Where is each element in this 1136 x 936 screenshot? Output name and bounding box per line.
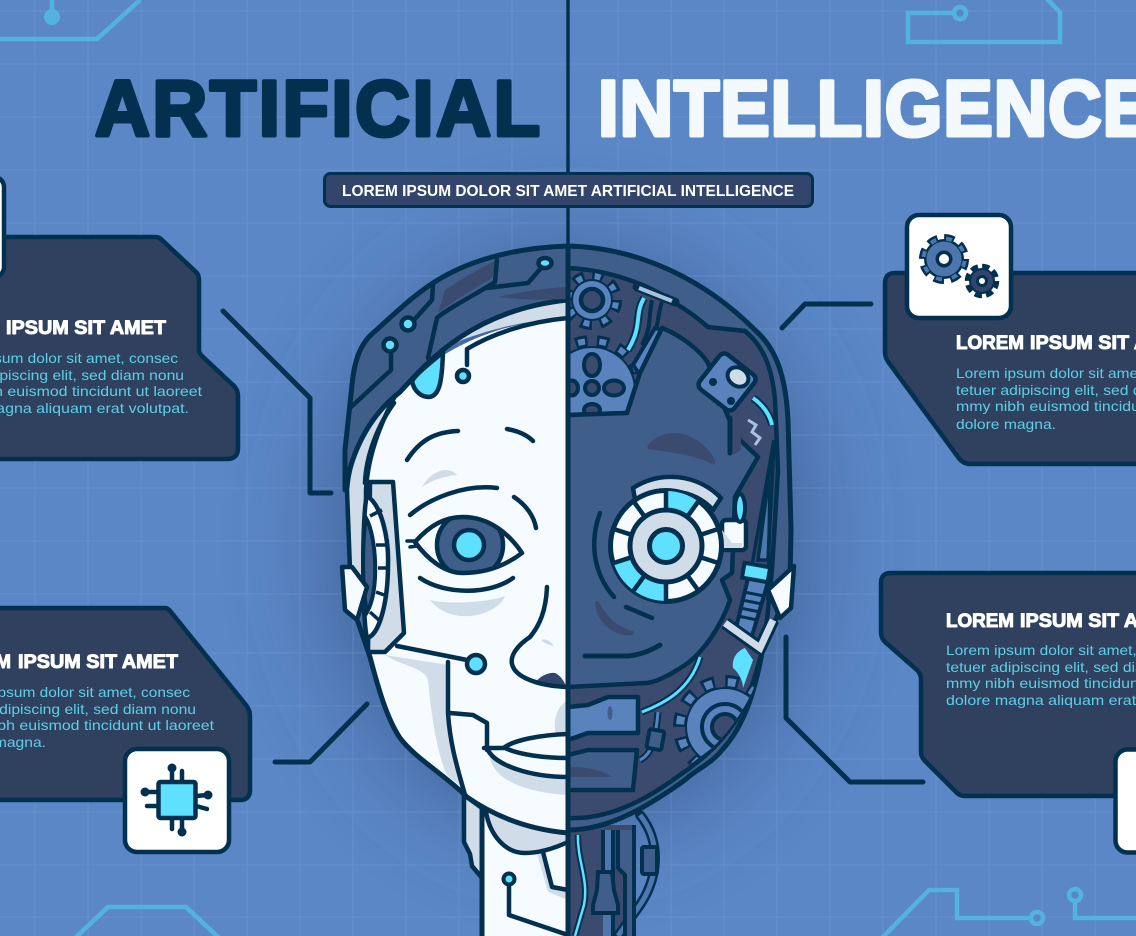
panel text: left bottom: [0, 684, 214, 750]
side strip: [347, 392, 397, 595]
ear panel: [363, 482, 404, 652]
gear: bottom right: [680, 682, 770, 772]
ear spike: right: [768, 566, 794, 618]
brows and wrinkles: [407, 429, 536, 616]
connector: left top: [223, 311, 331, 493]
panel heading: left bottom: IPSUM SIT AMET: [18, 652, 178, 673]
outer shell: [568, 246, 791, 830]
title word: artificial: ARTIFICIAL: [95, 65, 540, 153]
block connector: [696, 351, 758, 413]
brow shadow: [650, 435, 713, 462]
jaw shading: [385, 655, 465, 790]
head centre seam: [566, 244, 570, 936]
panel: right top: [885, 215, 1136, 464]
panel heading: left top: IPSUM SIT AMET: [6, 318, 166, 339]
circuit: bottom right: [882, 889, 1136, 936]
panel text: right bottom: [946, 642, 1136, 708]
nose: [512, 587, 568, 687]
icon: microchip: [125, 749, 229, 852]
cyan wire: right: [753, 398, 772, 425]
gear: top: [568, 276, 616, 324]
forehead circuit: [457, 318, 568, 382]
subtitle pill: [324, 174, 812, 206]
icon: gears: [907, 215, 1011, 318]
face outline top: [365, 403, 394, 483]
gear plate: [570, 335, 637, 413]
head: right mechanical half: [543, 246, 794, 830]
connector: right top: [782, 304, 871, 328]
title: [95, 65, 1136, 153]
human eye: [407, 512, 522, 578]
face base: [365, 318, 568, 833]
panel heading: right bottom: [946, 611, 1136, 632]
panel text: right top: [956, 365, 1136, 432]
panel icon: left top: [0, 177, 4, 277]
helmet shade: [438, 260, 568, 313]
jaw pieces: [568, 657, 700, 790]
central divider line: [566, 0, 570, 936]
panel icon: right bottom: [1116, 750, 1136, 852]
piston: [736, 563, 771, 636]
title word: intelligence: INTELLIGENCE: [598, 65, 1136, 153]
connector: left bottom: [275, 704, 367, 762]
robot head: [342, 244, 794, 936]
forehead grey strip: [440, 298, 568, 345]
circuit: top right: [908, 0, 1060, 42]
cyan blob and bracket: [725, 620, 773, 688]
panel: left top: [0, 177, 238, 459]
panel heading: right top: LOREM: [956, 333, 1024, 354]
robotic eye: [610, 477, 746, 602]
tubes: [758, 445, 774, 560]
neck: left human: [464, 795, 568, 936]
panel text: left top: [0, 350, 202, 416]
panel: right bottom: [881, 573, 1136, 852]
helmet circuits: [350, 258, 552, 408]
helmet band: [345, 246, 568, 490]
mouth: [484, 734, 568, 777]
head: left human half: [342, 246, 568, 833]
face plate: [568, 328, 758, 687]
subtitle pill: LOREM IPSUM DOLOR SIT AMET ARTIFICIAL INTELLIGENCE: [342, 183, 794, 200]
circuit: top left: [0, 0, 140, 39]
circuit: bottom left: [75, 907, 219, 936]
panel heading: right bottom: LOREM: [946, 611, 1014, 632]
wires and connector: [628, 287, 675, 375]
panel text: right top: dolore magna.: [956, 416, 1056, 432]
connector: right bottom: [786, 637, 923, 782]
neck: right mechanical: [568, 815, 657, 936]
ear spike: left: [342, 567, 367, 620]
inner cavity: [568, 268, 778, 818]
jaw outline: [358, 622, 568, 833]
cheek lines: [585, 513, 660, 656]
jaw panel lines: [397, 646, 487, 795]
teardrop: [412, 352, 443, 397]
panel heading: right top: [956, 333, 1136, 354]
panel: left bottom: [0, 608, 250, 852]
